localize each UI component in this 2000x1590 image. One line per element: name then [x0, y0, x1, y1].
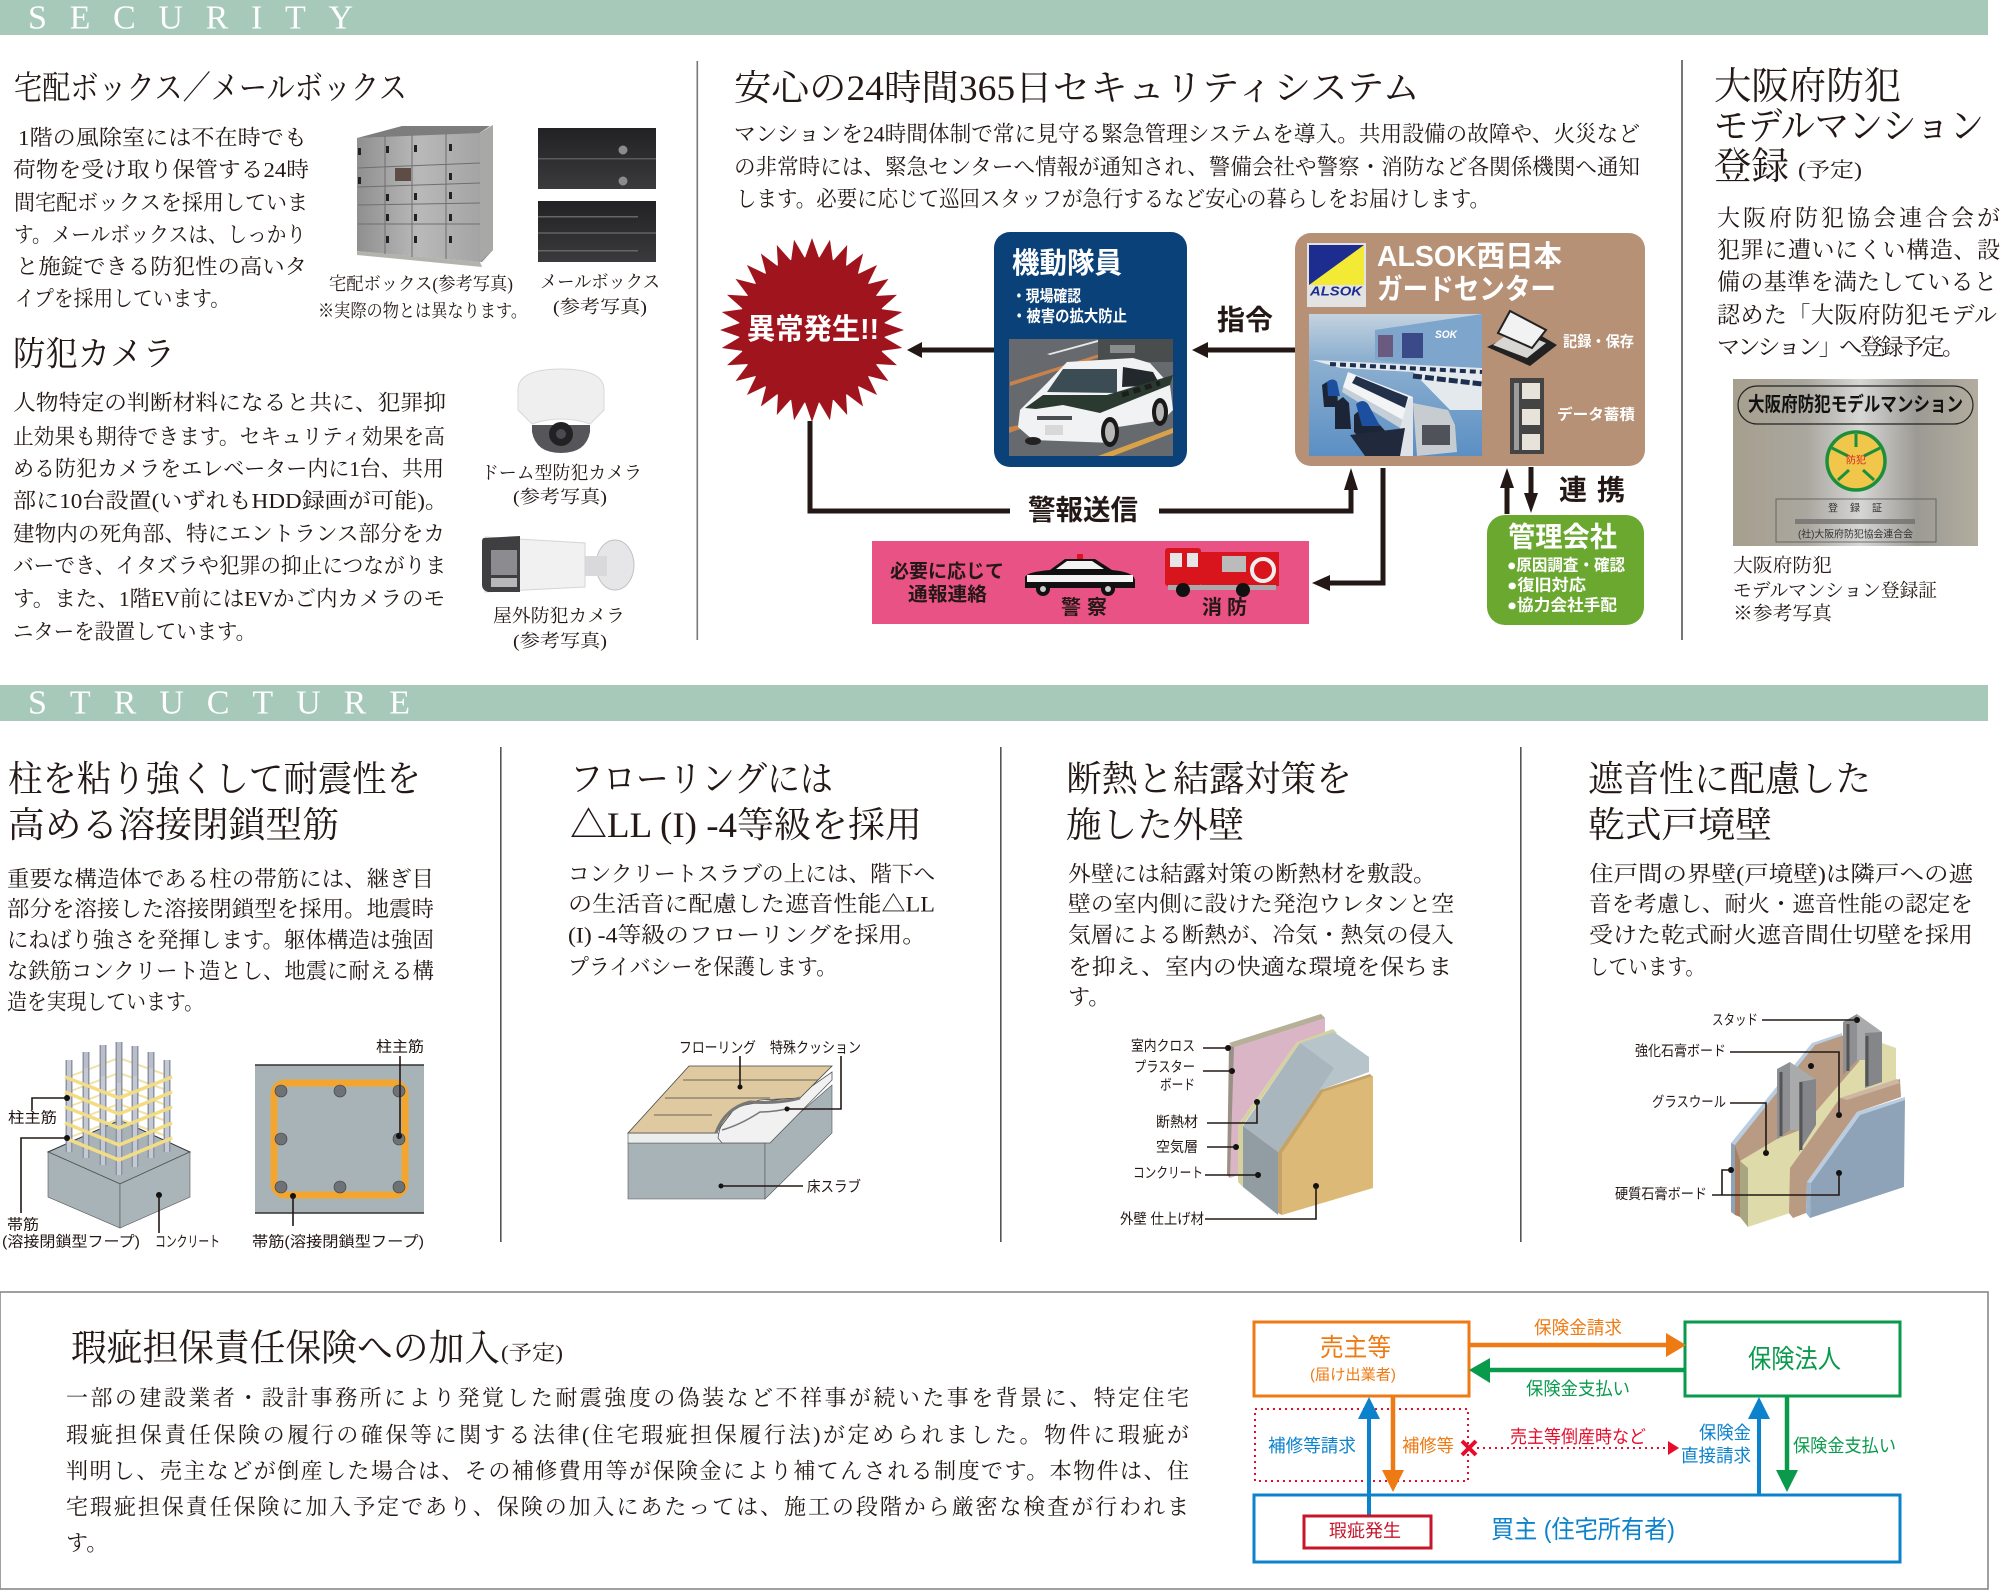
divider	[1520, 747, 1522, 1242]
panel: police and fire notification: 消防	[1202, 596, 1247, 619]
diagram: partition wall section	[1712, 1014, 1905, 1227]
diagram labels: partition wall: 硬質石膏ボード	[1615, 1185, 1707, 1203]
icon: data cabinet	[1510, 378, 1544, 454]
captions: parcel box and mail box	[318, 272, 660, 321]
heading: partition wall	[1588, 759, 1871, 845]
heading: insurance: (予定)	[501, 1341, 563, 1365]
text block: parcel box description: 間宅配ボックスを採用していま	[14, 191, 308, 215]
box: insurance corporation	[1685, 1322, 1900, 1396]
heading: column: 柱を粘り強くして耐震性を	[8, 759, 421, 799]
panel: management company: ●復旧対応	[1507, 576, 1586, 594]
text block: exterior wall description: を抑え、室内の快適な環境を保ちま	[1068, 954, 1452, 980]
diagram labels: exterior wall: コンクリート	[1133, 1165, 1203, 1182]
heading: security cameras: 防犯カメラ	[13, 336, 175, 374]
arrow: direct claim up	[1748, 1397, 1770, 1495]
heading: flooring: △LL (I) -4等級を採用	[570, 805, 922, 845]
box: buyer: 買主 (住宅所有者)	[1491, 1516, 1675, 1544]
text block: flooring description	[568, 862, 935, 980]
panel: management company	[1487, 515, 1644, 625]
diagram labels: column cross section: 帯筋(溶接閉鎖型フープ)	[252, 1234, 424, 1250]
flow labels: 直接請求	[1681, 1446, 1751, 1466]
arrow: insurance payment to seller	[1469, 1358, 1684, 1383]
caption: dome camera: (参考写真)	[513, 487, 607, 508]
flow labels	[1268, 1318, 1896, 1466]
text block: exterior wall description: 壁の室内側に設けた発泡ウレタンと空	[1068, 892, 1454, 916]
panel: management company: ●協力会社手配	[1507, 596, 1617, 614]
diagram labels: column isometric	[2, 1110, 220, 1250]
heading: insurance: 瑕疵担保責任保険への加入	[71, 1328, 500, 1370]
diagram labels: column cross section: 柱主筋	[376, 1038, 424, 1056]
photo: dome camera	[518, 369, 604, 453]
arrow: guard center to police/fire	[1312, 468, 1383, 591]
connector: alarm transmission line	[810, 421, 1351, 511]
text block: parcel box description: と施錠できる防犯性の高いタ	[16, 255, 307, 279]
section band: SECURITY	[0, 0, 1988, 36]
diagram labels: exterior wall: 断熱材	[1156, 1114, 1198, 1131]
caption: bullet camera: (参考写真)	[513, 631, 607, 652]
heading: Osaka model mansion: 登録	[1714, 146, 1789, 188]
heading: Osaka model mansion: (予定)	[1798, 158, 1862, 182]
diagram labels: flooring: 床スラブ	[807, 1178, 861, 1196]
flow labels: 保険金支払い	[1526, 1379, 1630, 1399]
label: command: 指令	[1217, 304, 1273, 336]
heading: flooring: フローリングには	[570, 759, 833, 799]
text block: column description: 部分を溶接した溶接閉鎖型を採用。地震時	[7, 896, 434, 922]
arrow: down to management company	[1524, 467, 1538, 513]
caption: registration plate	[1733, 554, 1937, 624]
text block: parcel box description: 荷物を受け取り保管する24時	[13, 158, 309, 182]
text block: camera description: 部に10台設置(いずれもHDD録画が可能)。	[13, 489, 448, 513]
panel: ALSOK guard center: ALSOK西日本	[1377, 240, 1562, 273]
text block: model mansion description	[1717, 206, 2000, 360]
text block: security system description	[734, 122, 1640, 212]
diagram labels: column isometric: 帯筋	[7, 1216, 39, 1234]
section band: STRUCTURE	[0, 684, 1988, 722]
diagram labels: exterior wall	[1120, 1038, 1204, 1228]
diagram labels: flooring: フローリング	[679, 1040, 756, 1056]
heading: exterior wall: 断熱と結露対策を	[1066, 759, 1352, 799]
text block: model mansion description: 備の基準を満たしていると	[1717, 270, 1997, 294]
heading: security system: 安心の24時間365日セキュリティシステム	[734, 68, 1420, 108]
flow labels: 保険金請求	[1534, 1318, 1622, 1338]
text block: partition wall description	[1589, 862, 1974, 980]
diagram labels: flooring	[679, 1040, 861, 1196]
heading: Osaka model mansion	[1714, 66, 1984, 188]
diagram: flooring section	[628, 1056, 841, 1199]
label: cooperation: 連携	[1559, 474, 1625, 506]
section band: STRUCTURE: STRUCTURE	[28, 684, 410, 722]
text block: insurance description	[66, 1386, 1189, 1556]
diagram labels: flooring: 特殊クッション	[770, 1040, 861, 1056]
flow labels: 保険金支払い	[1793, 1436, 1896, 1456]
arrow: insurance claim	[1469, 1333, 1686, 1357]
box: defect occurs: 瑕疵発生	[1329, 1521, 1401, 1541]
arrow: alarm to guard center	[1344, 468, 1358, 490]
panel: Osaka model mansion	[1714, 66, 2000, 624]
text block: partition wall description: 音を考慮し、耐火・遮音性能の認定を	[1589, 892, 1973, 916]
panel: ALSOK guard center: 記録・保存	[1563, 332, 1634, 350]
text block: flooring description: プライバシーを保護します。	[568, 954, 837, 980]
heading: Osaka model mansion: 大阪府防犯	[1714, 66, 1901, 108]
diagram labels: partition wall: スタッド	[1712, 1012, 1758, 1029]
icon: ALSOK logo	[1307, 243, 1366, 307]
captions: parcel box and mail box: メールボックス	[540, 272, 660, 292]
panel: exterior wall	[1066, 759, 1454, 1228]
text block: model mansion description: 犯罪に遭いにくい構造、設	[1717, 238, 2000, 262]
icon: ALSOK logo: ALSOK	[1309, 284, 1364, 298]
heading: column	[8, 759, 421, 845]
heading: partition wall: 乾式戸境壁	[1588, 805, 1772, 845]
photo: registration plate: (社)大阪府防犯協会連合会	[1798, 528, 1913, 540]
diagram labels: exterior wall: プラスター	[1134, 1059, 1195, 1076]
text block: exterior wall description: 外壁には結露対策の断熱材を敷設。	[1068, 862, 1436, 886]
arrow: payment to buyer	[1776, 1396, 1798, 1492]
text block: parcel box description: す。メールボックスは、しっかり	[14, 223, 306, 247]
text block: column description: 造を実現しています。	[7, 990, 204, 1014]
diagram labels: exterior wall: 外壁 仕上げ材	[1120, 1211, 1204, 1228]
icon: record storage	[1487, 311, 1557, 366]
panel: welded closed hoop column	[2, 759, 434, 1250]
text block: camera description: 人物特定の判断材料になると共に、犯罪抑	[13, 391, 446, 415]
heading: exterior wall: 施した外壁	[1066, 805, 1244, 845]
flow chart: insurance scheme	[1254, 1318, 1900, 1562]
text block: insurance description: 判明し、売主などが倒産した場合は、その補修費用等が保険金により補てんされる制度です。本物件は、住	[66, 1458, 1189, 1484]
panel: patrol staff: ・被害の拡大防止	[1012, 306, 1127, 326]
photo: control room	[1309, 314, 1482, 456]
text block: partition wall description: しています。	[1589, 954, 1705, 980]
panel: defect liability insurance	[0, 1292, 1988, 1589]
panel: police and fire notification: 必要に応じて	[890, 560, 1004, 582]
panel: patrol staff: ・現場確認	[1012, 286, 1081, 306]
text block: model mansion description: 認めた「大阪府防犯モデル	[1717, 302, 1997, 328]
text block: insurance description: す。	[66, 1530, 108, 1556]
text block: column description: 重要な構造体である柱の帯筋には、継ぎ目	[7, 866, 434, 892]
diagram labels: exterior wall: ボード	[1160, 1077, 1195, 1094]
text block: flooring description: の生活音に配慮した遮音性能△LL	[568, 892, 935, 916]
text block: security system description: マンションを24時間体制で常に見守る緊急管理システムを導入。共用設備の故障や、火災など	[734, 122, 1640, 146]
text block: camera description: 止効果も期待できます。セキュリティ効果を高	[13, 425, 445, 449]
divider	[696, 61, 698, 640]
icon: fire engine	[1165, 548, 1279, 597]
panel: management company: ●原因調査・確認	[1507, 556, 1625, 574]
panel: flooring	[568, 759, 935, 1199]
icon: anomaly starburst	[720, 238, 904, 422]
arrow: guard center to patrol	[1192, 342, 1295, 358]
text block: insurance description: 宅瑕疵担保責任保険に加入予定であり、保険の加入にあたっては、施工の段階から厳密な検査が行われま	[66, 1494, 1189, 1520]
photo: registration plate: 防犯	[1846, 454, 1866, 466]
text block: column description: にねばり強さを発揮します。躯体構造は強固	[7, 928, 434, 952]
icon: police car	[1025, 554, 1135, 596]
arrow: repair claim up	[1358, 1397, 1380, 1515]
box: buyer	[1254, 1495, 1900, 1562]
arrow: repairs down	[1382, 1396, 1404, 1492]
diagram: exterior wall section	[1203, 1014, 1373, 1219]
panel: patrol staff: 機動隊員	[1012, 247, 1122, 280]
panel: dry partition wall	[1588, 759, 1974, 1227]
caption: dome camera: ドーム型防犯カメラ	[481, 463, 642, 483]
section band: SECURITY: SECURITY	[28, 0, 353, 36]
diagram labels: column isometric: (溶接閉鎖型フープ)	[2, 1234, 140, 1250]
caption: dome camera	[481, 463, 642, 508]
heading: exterior wall	[1066, 759, 1352, 845]
icon: anomaly starburst: 異常発生!!	[747, 313, 879, 346]
caption: bullet camera: 屋外防犯カメラ	[493, 606, 625, 626]
diagram labels: column isometric: コンクリート	[155, 1234, 220, 1250]
box: insurance corporation: 保険法人	[1748, 1344, 1841, 1374]
panel: patrol staff	[994, 232, 1187, 467]
flow labels: 保険金	[1699, 1423, 1751, 1443]
captions: parcel box and mail box: ※実際の物とは異なります。	[318, 301, 527, 321]
text block: camera description	[13, 391, 448, 644]
text block: camera description: める防犯カメラをエレベーター内に1台、共用	[13, 457, 444, 481]
panel: police and fire notification: 警察	[1061, 596, 1107, 619]
heading: flooring	[570, 759, 922, 845]
box: seller: (届け出業者)	[1310, 1366, 1396, 1384]
diagram labels: column isometric: 柱主筋	[8, 1110, 57, 1126]
text block: camera description: バーでき、イタズラや犯罪の抑止につながりま	[13, 554, 446, 578]
text block: parcel box description: イプを採用しています。	[15, 287, 230, 311]
captions: parcel box and mail box: (参考写真)	[553, 297, 647, 318]
panel: parcel box / mail box	[13, 70, 660, 321]
box: seller: 売主等	[1320, 1334, 1391, 1362]
text block: security system description: します。必要に応じて巡回スタッフが急行するなど安心の暮らしをお届けします。	[736, 186, 1490, 212]
text block: camera description: 建物内の死角部、特にエントランス部分をカ	[13, 522, 445, 546]
diagram labels: partition wall	[1615, 1012, 1758, 1203]
arrow: up from management company	[1500, 468, 1514, 514]
flow labels: 売主等倒産時など	[1510, 1427, 1646, 1447]
photo: control room: SOK	[1435, 329, 1458, 341]
text block: camera description: ニターを設置しています。	[13, 620, 256, 644]
panel: ALSOK guard center: データ蓄積	[1557, 406, 1635, 424]
diagram labels: column cross section	[252, 1038, 424, 1250]
text block: model mansion description: マンション」へ登録予定。	[1717, 334, 1965, 360]
panel: 24-hour security system	[720, 68, 1645, 625]
dotted box: repair claim	[1255, 1409, 1468, 1481]
icon: red cross	[1462, 1441, 1476, 1455]
text block: partition wall description: 住戸間の界壁(戸境壁)は隣戸への遮	[1589, 862, 1974, 886]
text block: model mansion description: 大阪府防犯協会連合会が	[1717, 206, 2000, 230]
photo: registration plate: 登録証	[1828, 502, 1882, 514]
arrow: patrol to incident	[907, 342, 994, 358]
diagram labels: partition wall: グラスウール	[1652, 1094, 1726, 1111]
heading: parcel box: 宅配ボックス／メールボックス	[14, 70, 407, 107]
photo: registration plate	[1733, 379, 1978, 546]
panel: ALSOK guard center: ガードセンター	[1377, 273, 1556, 306]
diagram labels: exterior wall: 室内クロス	[1131, 1038, 1195, 1055]
box: seller	[1254, 1322, 1469, 1396]
text block: parcel box description: 1階の風除室には不在時でも	[18, 126, 307, 150]
divider	[1681, 60, 1683, 640]
divider	[1000, 747, 1002, 1242]
caption: registration plate: モデルマンション登録証	[1733, 580, 1937, 602]
captions: parcel box and mail box: 宅配ボックス(参考写真)	[329, 273, 513, 295]
diagram labels: partition wall: 強化石膏ボード	[1635, 1043, 1726, 1060]
panel: ALSOK guard center	[1295, 233, 1645, 466]
text block: flooring description: コンクリートスラブの上には、階下へ	[568, 862, 935, 886]
diagram: column cross section	[255, 1056, 424, 1226]
text block: partition wall description: 受けた乾式耐火遮音間仕切壁を採用	[1589, 922, 1973, 948]
panel: security cameras	[13, 336, 642, 652]
panel: management company: 管理会社	[1508, 522, 1617, 552]
text block: exterior wall description: 気層による断熱が、冷気・熱気の侵入	[1068, 922, 1454, 948]
caption: bullet camera	[493, 606, 625, 652]
photo: mail boxes	[538, 128, 656, 262]
photo: bullet camera	[482, 536, 634, 592]
text block: exterior wall description: す。	[1068, 984, 1110, 1010]
heading: column: 高める溶接閉鎖型筋	[8, 805, 339, 845]
text block: column description	[7, 866, 434, 1014]
caption: registration plate: ※参考写真	[1733, 602, 1833, 624]
text block: camera description: す。また、1階EV前にはEVかご内カメラのモ	[13, 587, 445, 611]
text block: column description: な鉄筋コンクリート造とし、地震に耐える構	[7, 958, 434, 984]
box: defect occurs	[1304, 1516, 1431, 1548]
panel: police and fire notification: 通報連絡	[908, 584, 987, 606]
panel: police and fire notification	[872, 541, 1309, 624]
text block: insurance description: 一部の建設業者・設計事務所により発覚した耐震強度の偽装など不祥事が続いた事を背景に、特定住宅	[66, 1386, 1189, 1410]
text block: exterior wall description	[1068, 862, 1454, 1010]
label: alarm transmission: 警報送信	[1028, 494, 1138, 526]
text block: parcel box description	[13, 126, 309, 311]
arrow: seller bankrupt dotted	[1477, 1441, 1679, 1455]
heading: partition wall: 遮音性に配慮した	[1588, 759, 1871, 799]
flow labels: 補修等	[1402, 1436, 1454, 1456]
flow labels: 補修等請求	[1268, 1436, 1356, 1456]
text block: flooring description: (I) -4等級のフローリングを採用。	[568, 922, 926, 948]
text block: insurance description: 瑕疵担保責任保険の履行の確保等に関する法律(住宅瑕疵担保履行法)が定められました。物件に瑕疵が	[66, 1422, 1189, 1448]
divider	[500, 747, 502, 1242]
diagram: column isometric	[21, 1042, 190, 1233]
photo: parcel locker	[357, 125, 493, 267]
text block: security system description: の非常時には、緊急センターへ情報が通知され、警備会社や警察・消防など各関係機関へ通知	[734, 154, 1640, 180]
caption: registration plate: 大阪府防犯	[1733, 554, 1832, 576]
photo: patrol car	[1009, 339, 1173, 456]
diagram labels: exterior wall: 空気層	[1156, 1139, 1198, 1156]
decorative studs follow as part of the diagram	[1843, 1014, 1857, 1075]
